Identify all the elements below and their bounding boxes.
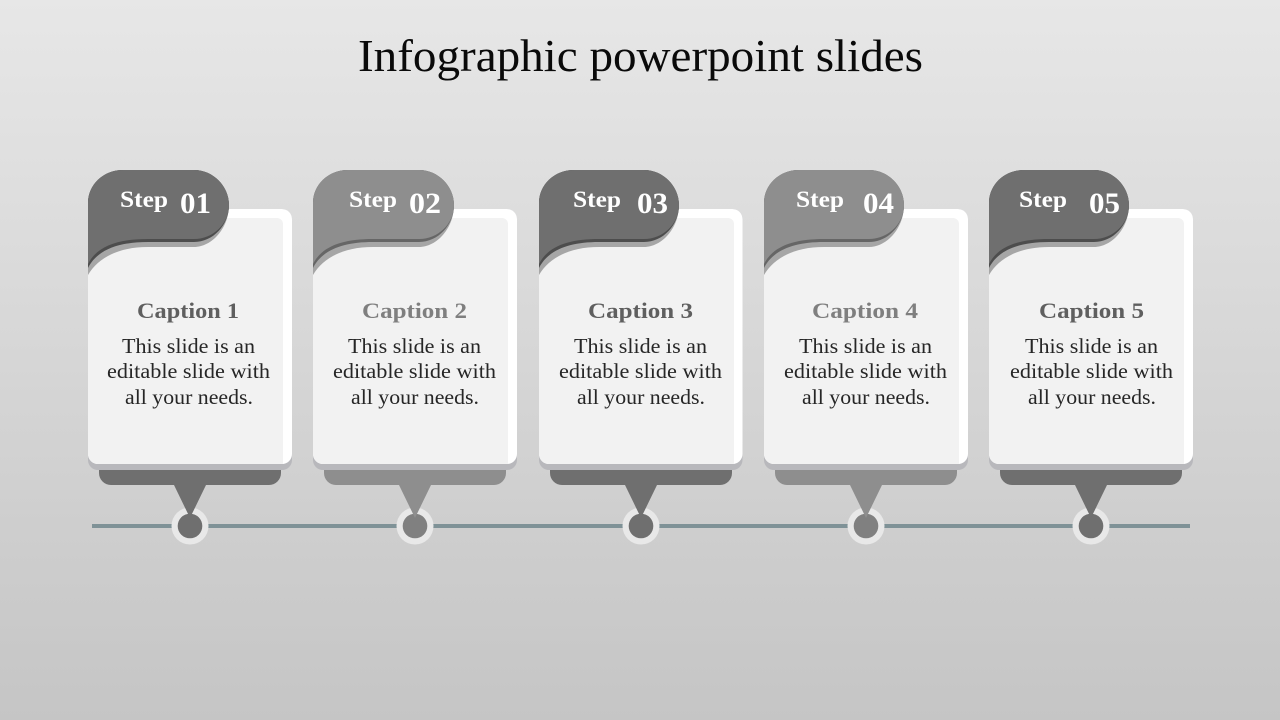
- step tab: Step: [573, 187, 621, 212]
- caption text: all your needs.: [802, 385, 930, 409]
- step tab: 05: [1089, 187, 1120, 220]
- timeline marker: [396, 508, 434, 544]
- panel: step 3: [539, 170, 742, 544]
- step tab: 03: [637, 187, 668, 220]
- pointer: [775, 470, 957, 518]
- caption text: [559, 298, 723, 409]
- card body: [989, 209, 1193, 470]
- step tab: [764, 170, 904, 275]
- step tab: [88, 170, 229, 275]
- step tab: 01: [180, 187, 211, 220]
- caption text: Caption 5: [1039, 298, 1144, 323]
- caption text: This slide is an: [574, 334, 708, 358]
- pointer: [550, 470, 732, 518]
- step tab: Step: [349, 187, 397, 212]
- timeline marker: [1072, 508, 1110, 544]
- caption text: all your needs.: [125, 385, 253, 409]
- caption text: This slide is an: [348, 334, 482, 358]
- caption text: Caption 4: [812, 298, 918, 323]
- step tab: Step: [796, 187, 844, 212]
- step tab: [539, 170, 679, 275]
- timeline marker: [848, 508, 884, 544]
- card body: [88, 209, 292, 470]
- step tab: Step: [120, 187, 168, 212]
- caption text: all your needs.: [1028, 385, 1156, 409]
- card body: [764, 209, 968, 470]
- caption text: [107, 298, 271, 409]
- card body: [539, 209, 742, 470]
- caption text: [784, 298, 948, 409]
- caption text: editable slide with: [333, 359, 497, 383]
- pointer: [1000, 470, 1182, 518]
- step tab: Step: [1019, 187, 1067, 212]
- caption text: [333, 298, 497, 409]
- timeline marker: [622, 508, 660, 544]
- caption text: all your needs.: [351, 385, 479, 409]
- caption text: This slide is an: [799, 334, 933, 358]
- caption text: all your needs.: [577, 385, 705, 409]
- caption text: editable slide with: [784, 359, 948, 383]
- caption text: Caption 1: [137, 298, 239, 323]
- pointer: [99, 470, 281, 518]
- pointer: [324, 470, 506, 518]
- caption text: editable slide with: [1010, 359, 1174, 383]
- caption text: [1010, 298, 1174, 409]
- step tab: 04: [863, 187, 894, 220]
- panel: step 5: [989, 170, 1193, 544]
- timeline marker: [172, 508, 208, 544]
- caption text: Caption 2: [362, 298, 467, 323]
- panel: step 1: [88, 170, 292, 544]
- title: Infographic powerpoint slides: [358, 30, 923, 81]
- step tab: 02: [409, 187, 441, 220]
- caption text: editable slide with: [559, 359, 723, 383]
- panel: step 4: [764, 170, 968, 544]
- step tab: [313, 170, 454, 275]
- caption text: editable slide with: [107, 359, 271, 383]
- caption text: Caption 3: [588, 298, 693, 323]
- card body: [313, 209, 517, 470]
- panel: step 2: [313, 170, 517, 544]
- step tab: [989, 170, 1129, 275]
- caption text: This slide is an: [1025, 334, 1159, 358]
- timeline line: [92, 524, 1190, 528]
- caption text: This slide is an: [122, 334, 256, 358]
